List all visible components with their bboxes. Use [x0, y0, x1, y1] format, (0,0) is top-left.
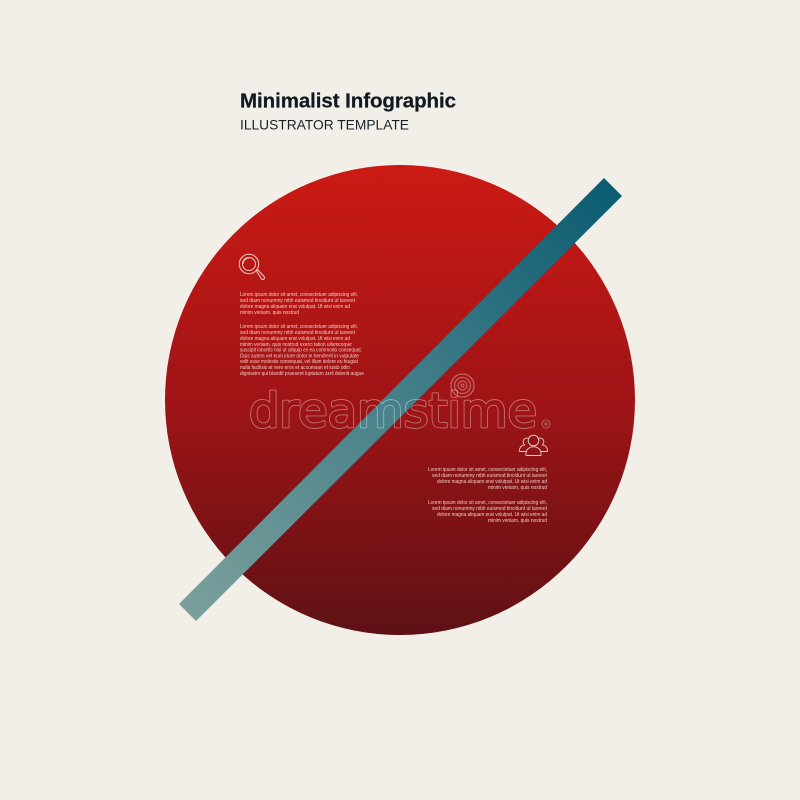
paragraph: left bottom: dolore magna aliquam erat volutpat. Ut wisi enim ad: [240, 336, 350, 342]
watermark registered mark: [542, 420, 550, 428]
icon: magnifying glass: [239, 254, 265, 280]
paragraph: right top: dolore magna aliquam erat volutpat. Ut wisi enim ad: [437, 479, 547, 485]
paragraph: right bottom: sed diam nonummy nibh euismod tincidunt ut laoreet: [432, 506, 548, 512]
paragraph: left bottom: nulla facilisis at vero eros et accumsan et iusto odio: [240, 365, 350, 371]
paragraph: right bottom: minim veniam, quis nostrud: [488, 518, 547, 524]
paragraph: right top: Lorem ipsum dolor sit amet, consectetuer adipiscing elit,: [428, 467, 547, 473]
paragraph: left bottom: [240, 324, 364, 377]
red circle: [165, 165, 635, 635]
text block: right column: [428, 467, 548, 524]
paragraph: left top: dolore magna aliquam erat volutpat. Ut wisi enim ad: [240, 304, 350, 310]
paragraph: right bottom: [428, 500, 548, 524]
diagonal bar: [179, 178, 622, 621]
paragraph: left top: Lorem ipsum dolor sit amet, consectetuer adipiscing elit,: [240, 292, 358, 298]
paragraph: right top: minim veniam, quis nostrud: [488, 485, 547, 491]
paragraph: left top: sed diam nonummy nibh euismod tincidunt ut laoreet: [240, 298, 356, 304]
watermark: [250, 373, 550, 429]
title: Minimalist Infographic: [240, 90, 456, 112]
icon: group of people: [519, 435, 548, 456]
watermark spiral: [451, 374, 474, 397]
paragraph: left top: [240, 292, 358, 316]
watermark wordmark: [250, 390, 536, 429]
paragraph: right bottom: dolore magna aliquam erat volutpat. Ut wisi enim ad: [437, 512, 547, 518]
paragraph: right bottom: Lorem ipsum dolor sit amet, consectetuer adipiscing elit,: [428, 500, 547, 506]
paragraph: left bottom: minim veniam, quis nostrud exerci tation ullamcorper: [240, 342, 352, 348]
paragraph: left bottom: velit esse molestie consequat, vel illum dolore eu feugiat: [240, 359, 359, 365]
paragraph: left top: minim veniam, quis nostrud: [240, 310, 299, 316]
paragraph: left bottom: sed diam nonummy nibh euismod tincidunt ut laoreet: [240, 330, 356, 336]
paragraph: right top: sed diam nonummy nibh euismod tincidunt ut laoreet: [432, 473, 548, 479]
text block: left column: [240, 292, 364, 377]
subtitle: ILLUSTRATOR TEMPLATE: [240, 116, 409, 132]
paragraph: right top: [428, 467, 548, 491]
paragraph: left bottom: Lorem ipsum dolor sit amet, consectetuer adipiscing elit,: [240, 324, 358, 330]
paragraph: left bottom: dignissim qui blandit praesent luptatum zzril delenit augue: [240, 371, 364, 377]
paragraph: left bottom: suscipit lobortis nisl ut aliquip ex ea commodo consequat.: [240, 348, 362, 354]
paragraph: left bottom: Duis autem vel eum iriure dolor in hendrerit in vulputate: [240, 353, 359, 359]
